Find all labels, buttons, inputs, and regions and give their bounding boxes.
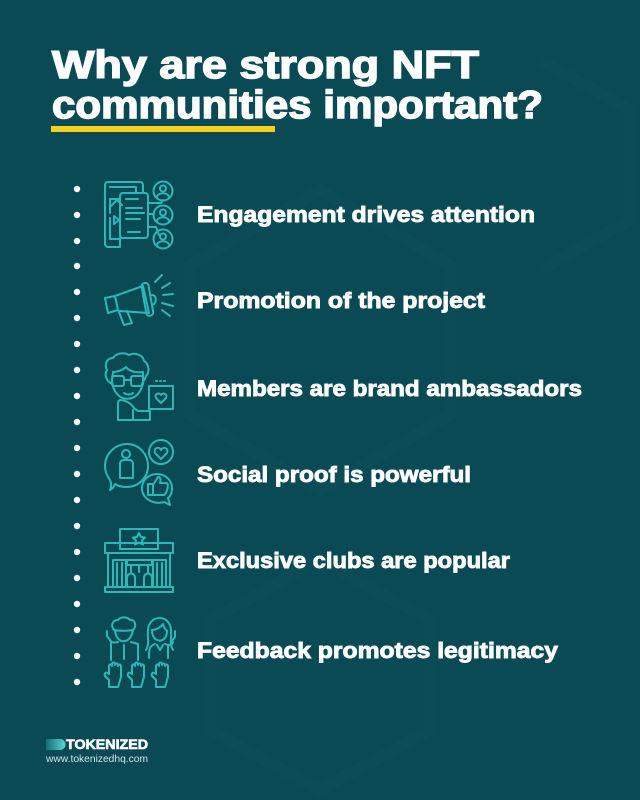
icon: social proof	[105, 440, 173, 505]
label: feedback: Feedback promotes legitimacy	[197, 638, 559, 663]
logo: Tokenized: TOKENIZED	[66, 737, 148, 752]
dotted timeline	[74, 186, 80, 685]
label: engagement: Engagement drives attention	[197, 202, 535, 227]
title	[52, 44, 543, 127]
label: ambassadors: Members are brand ambassadors	[197, 376, 582, 401]
logo: Tokenized	[45, 737, 148, 765]
icon: megaphone	[105, 275, 173, 325]
label: social proof: Social proof is powerful	[197, 462, 471, 487]
icon: brand ambassador	[106, 353, 173, 420]
label: promotion: Promotion of the project	[197, 288, 486, 313]
title: communities important?	[52, 84, 543, 127]
title underline	[51, 126, 275, 132]
logo: Tokenized: www.tokenizedhq.com	[45, 753, 148, 765]
icon: engagement	[105, 182, 172, 248]
icon: feedback	[105, 617, 175, 687]
icon: exclusive club	[105, 529, 173, 592]
title: Why are strong NFT	[52, 44, 479, 87]
label: exclusive clubs: Exclusive clubs are popular	[197, 548, 510, 573]
